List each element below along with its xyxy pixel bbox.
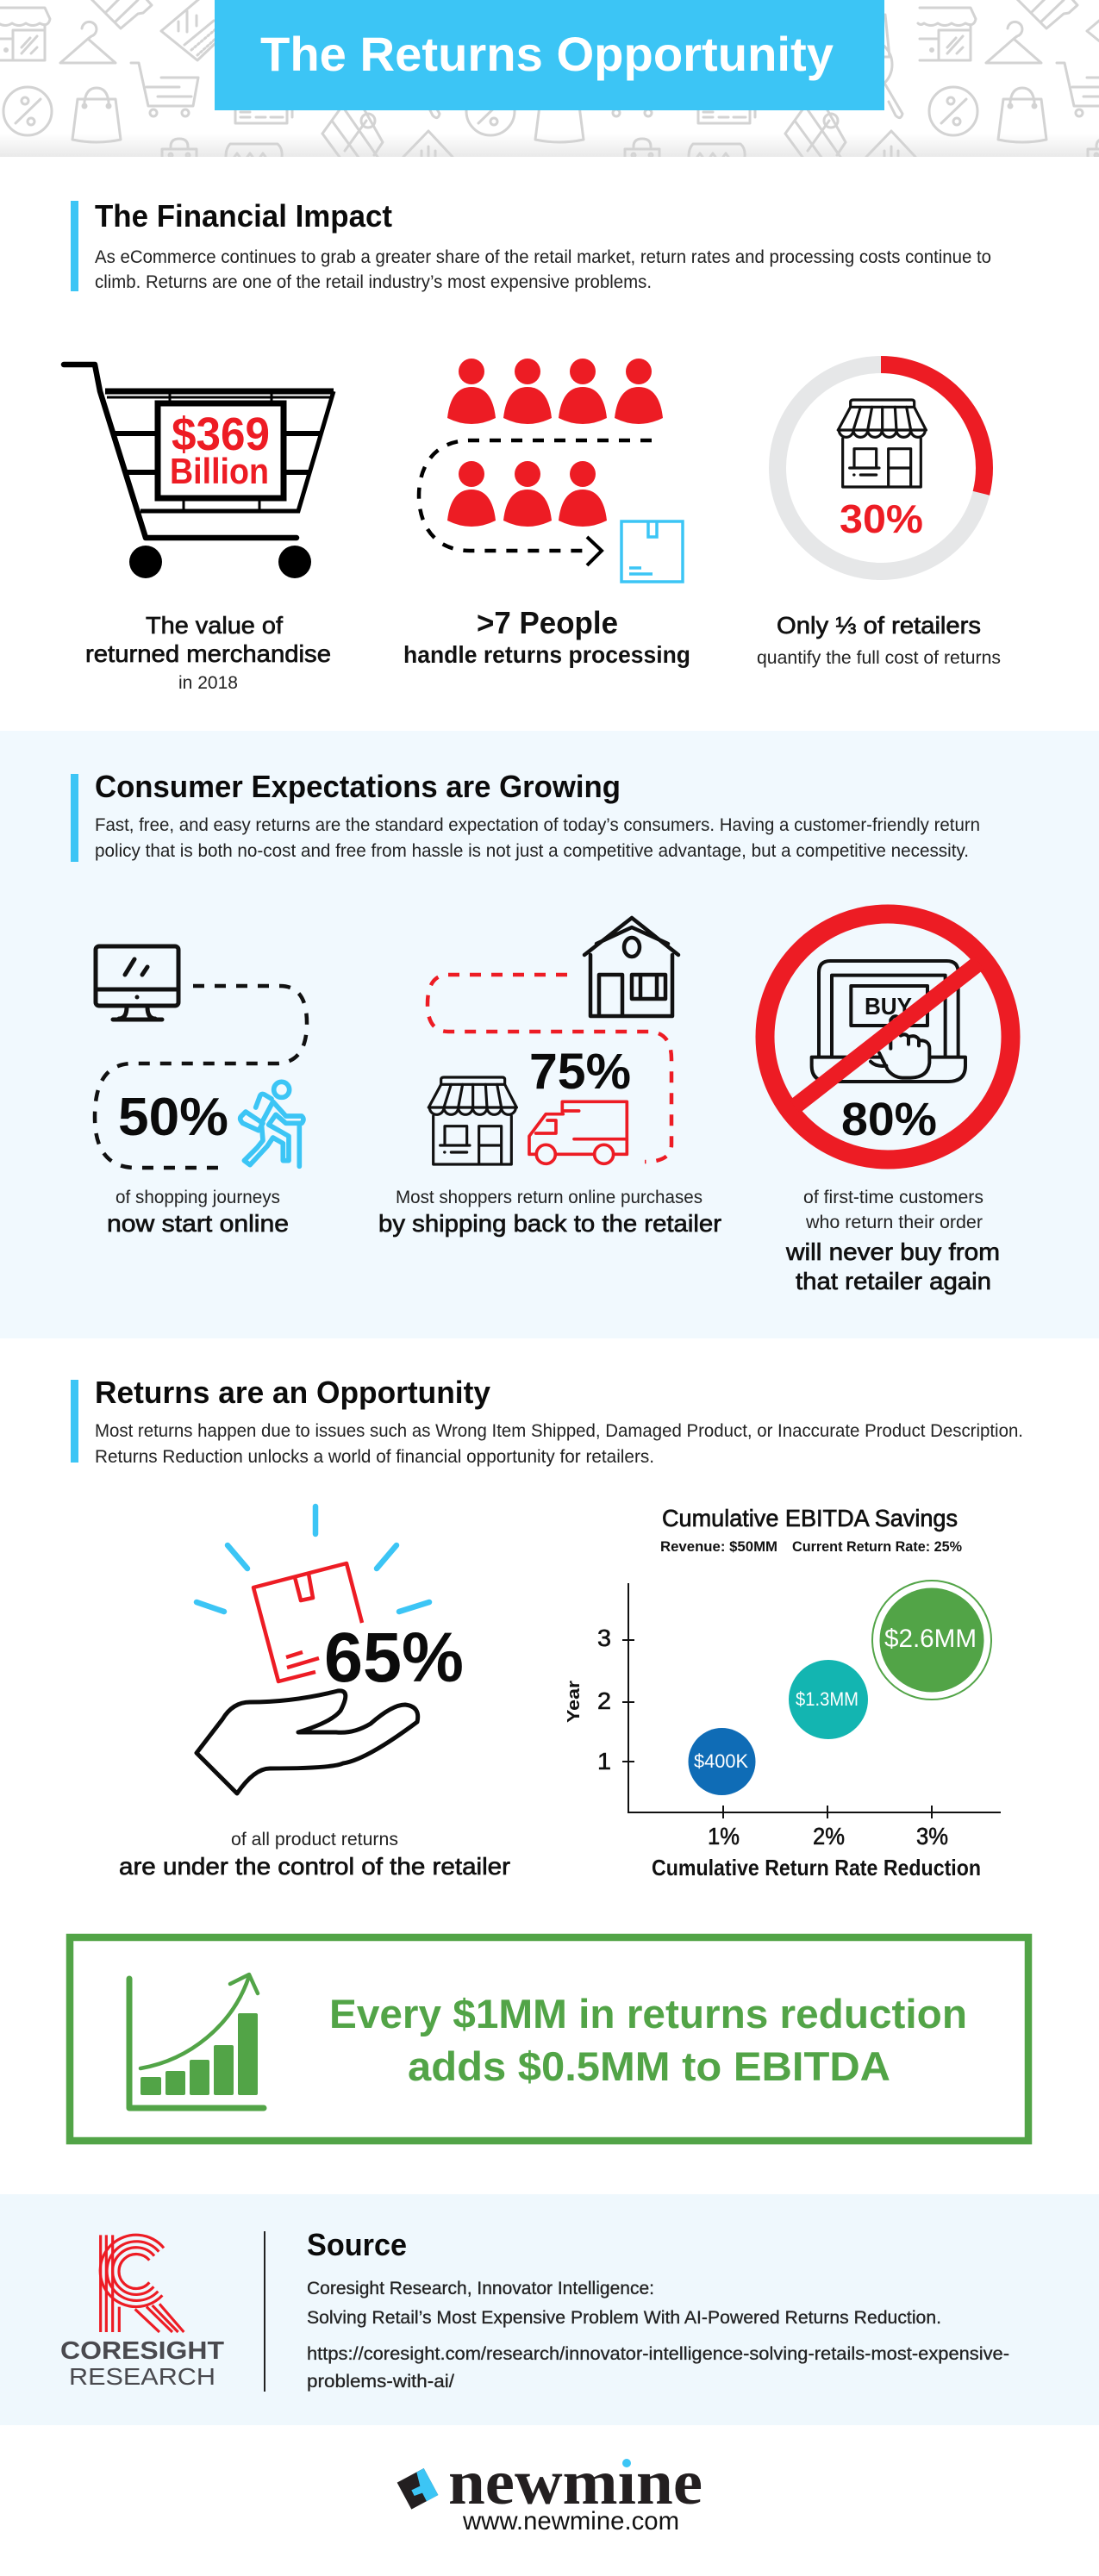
icon: newmine mark xyxy=(397,2468,438,2510)
icon: package over hand with 65% xyxy=(197,1506,464,1793)
callout: EBITDA: adds $0.5MM to EBITDA xyxy=(408,2043,890,2089)
source text: problems-with-ai/ xyxy=(307,2372,454,2392)
chart axes: 3% xyxy=(916,1823,948,1849)
caption: shopping journeys: of shopping journeys xyxy=(116,1188,280,1207)
caption: more than 7 people: handle returns processing xyxy=(403,641,690,668)
icon: monitor with path to hiker xyxy=(95,946,307,1168)
chart title xyxy=(660,1505,962,1555)
panel: source xyxy=(0,2194,1099,2425)
caption: value of returned merchandise: returned merchandise xyxy=(85,640,331,667)
icon: shopping cart with $369 Billion xyxy=(64,365,334,578)
chart axes xyxy=(565,1583,1001,1881)
icon: shopping cart with $369 Billion: Billion xyxy=(170,451,269,491)
source text xyxy=(307,2227,1009,2392)
caption: more than 7 people: >7 People xyxy=(477,605,618,640)
icon: hiker xyxy=(240,1082,303,1166)
section heading: financial impact: The Financial Impact xyxy=(95,198,392,234)
icon: no-buy sign with laptop: 80% xyxy=(841,1094,937,1145)
section heading: financial impact: As eCommerce continues to grab a greater share of the retail market, return rates and processing costs continue to xyxy=(95,247,991,267)
caption: first-time customers: will never buy from xyxy=(785,1238,1000,1265)
icon: no-buy sign with laptop xyxy=(765,914,1010,1160)
chart axes: 2% xyxy=(813,1823,845,1849)
section heading: returns opportunity xyxy=(71,1375,1023,1467)
caption: only one third of retailers: Only ⅓ of retailers xyxy=(777,612,981,639)
caption: shopping journeys: now start online xyxy=(107,1210,289,1237)
caption: under the control of the retailer: of all product returns xyxy=(231,1830,398,1849)
panel: the financial impact xyxy=(64,198,1001,693)
section heading: consumer expectations: policy that is both no-cost and free from hassle is not just a competitive advantage, but a competitive necessity. xyxy=(95,841,969,861)
icon: house, store and truck with dashed path: 75% xyxy=(529,1044,631,1100)
source text: https://coresight.com/research/innovator-intelligence-solving-retails-most-expensive- xyxy=(307,2344,1009,2364)
caption: only one third of retailers xyxy=(757,612,1001,668)
bubble: $2.6MM xyxy=(872,1581,991,1700)
bubble: $400K xyxy=(688,1728,755,1795)
caption: first-time customers: of first-time customers xyxy=(803,1188,983,1207)
section heading: financial impact: climb. Returns are one of the retail industry’s most expensive problems. xyxy=(95,272,652,292)
icon: shopping cart with $369 Billion: $369 xyxy=(172,409,270,460)
section heading: consumer expectations: Consumer Expectations are Growing xyxy=(95,769,621,804)
section heading: consumer expectations: Fast, free, and easy returns are the standard expectation of today’s consumers. Having a customer-friendly return xyxy=(95,815,980,835)
caption: first-time customers: that retailer again xyxy=(796,1268,991,1294)
caption: return by shipping back: Most shoppers return online purchases xyxy=(396,1188,702,1207)
section heading: financial impact xyxy=(71,198,991,292)
caption: value of returned merchandise: in 2018 xyxy=(178,673,238,693)
chart axes: 2 xyxy=(597,1687,611,1714)
source text: Solving Retail’s Most Expensive Problem With AI-Powered Returns Reduction. xyxy=(307,2308,941,2328)
section heading: returns opportunity: Returns Reduction unlocks a world of financial opportunity for retailers. xyxy=(95,1447,654,1467)
chart axes: 3 xyxy=(597,1625,611,1651)
bubble: $1.3MM xyxy=(789,1660,868,1739)
chart title: Revenue: $50MM xyxy=(660,1538,777,1555)
chart: 30% donut with store xyxy=(777,365,984,571)
callout: EBITDA xyxy=(70,1937,1028,2141)
caption: shopping journeys xyxy=(107,1188,289,1237)
callout: EBITDA: Every $1MM in returns reduction xyxy=(329,1991,967,2036)
icon: delivery truck xyxy=(529,1101,627,1163)
caption: under the control of the retailer xyxy=(119,1830,510,1880)
bubble: $400K: $400K xyxy=(694,1750,748,1772)
panel: consumer expectations xyxy=(0,731,1099,1338)
source text: Source xyxy=(307,2227,407,2262)
icon: growth chart xyxy=(129,1974,264,2108)
section heading: returns opportunity: Returns are an Opportunity xyxy=(95,1375,490,1410)
icon: package over hand with 65%: 65% xyxy=(324,1619,464,1697)
caption: first-time customers: who return their order xyxy=(805,1213,983,1232)
caption: only one third of retailers: quantify the full cost of returns xyxy=(757,648,1001,668)
chart title: Cumulative EBITDA Savings xyxy=(662,1505,958,1531)
caption: value of returned merchandise: The value of xyxy=(146,612,283,639)
caption: under the control of the retailer: are under the control of the retailer xyxy=(119,1853,510,1880)
chart axes: 1 xyxy=(597,1748,611,1775)
logo: newmine: www.newmine.com xyxy=(462,2507,679,2535)
logo: Coresight Research xyxy=(60,2235,224,2390)
logo: Coresight Research: RESEARCH xyxy=(69,2363,215,2390)
icon: house, store and truck with dashed path xyxy=(428,918,678,1164)
caption: value of returned merchandise xyxy=(85,612,331,693)
section heading: returns opportunity: Most returns happen due to issues such as Wrong Item Shipped, Damaged Product, or Inaccurate Product Description. xyxy=(95,1421,1023,1441)
chart title: Current Return Rate: 25% xyxy=(792,1538,962,1555)
bubble: $1.3MM: $1.3MM xyxy=(796,1688,859,1710)
source text: Coresight Research, Innovator Intelligence: xyxy=(307,2279,654,2298)
bubble chart: cumulative EBITDA savings xyxy=(565,1505,1001,1881)
caption: first-time customers xyxy=(785,1188,1000,1294)
panel: returns are an opportunity xyxy=(71,1375,1023,1881)
header pattern of shopping icons xyxy=(0,0,1099,168)
title banner: The Returns Opportunity xyxy=(260,27,834,81)
chart axes: Year xyxy=(565,1681,584,1723)
caption: return by shipping back: by shipping back to the retailer xyxy=(378,1210,721,1237)
caption: return by shipping back xyxy=(378,1188,721,1237)
chart axes: 1% xyxy=(708,1823,740,1849)
icon: monitor with path to hiker: 50% xyxy=(118,1088,228,1147)
icon: no-buy sign with laptop: BUY xyxy=(865,993,912,1020)
icon: seven people and path to package xyxy=(419,359,683,582)
logo: newmine: newmine xyxy=(448,2448,702,2518)
logo: newmine xyxy=(397,2448,702,2535)
chart: 30% donut with store: 30% xyxy=(840,496,923,541)
title banner xyxy=(215,0,884,110)
section heading: consumer expectations xyxy=(71,769,980,862)
chart axes: Cumulative Return Rate Reduction xyxy=(652,1855,981,1881)
caption: more than 7 people xyxy=(403,605,690,668)
logo: Coresight Research: CORESIGHT xyxy=(60,2337,224,2365)
bubble: $2.6MM: $2.6MM xyxy=(884,1625,977,1653)
